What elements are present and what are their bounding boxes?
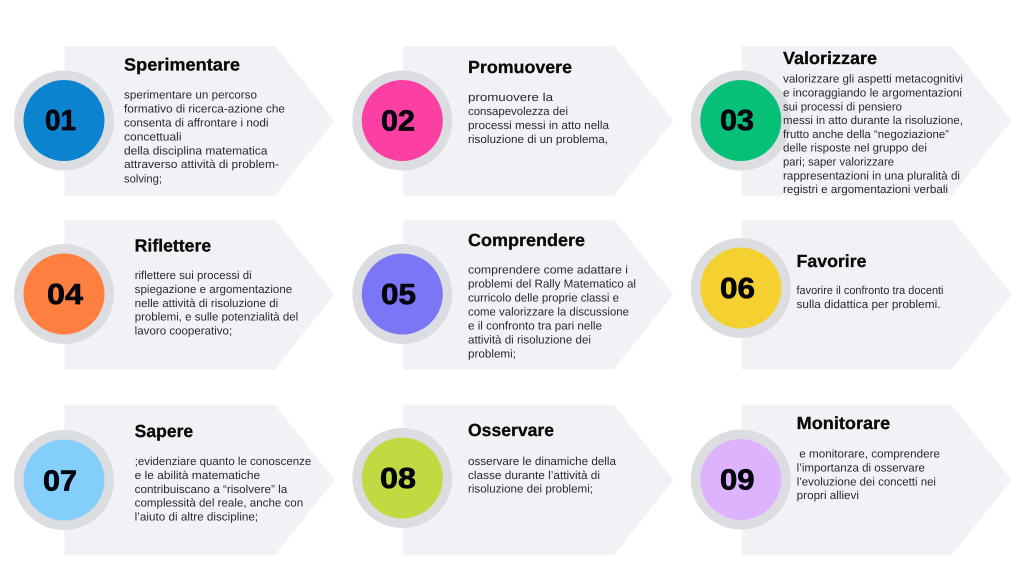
- body text 02: promuovere la: [468, 92, 554, 104]
- body text 06: sulla didattica per problemi.: [796, 299, 940, 311]
- number badge 07: [14, 430, 114, 530]
- body text 03: messi in atto durante la risoluzione,: [783, 115, 963, 127]
- body text 05: problemi;: [468, 348, 516, 360]
- body text 06: favorire il confronto tra docenti: [796, 285, 944, 297]
- body text 02: processi messi in atto nella: [468, 120, 610, 132]
- body text 08: classe durante l’attività di: [468, 470, 600, 482]
- body text 09: propri allievi: [797, 490, 859, 502]
- number badge 06: [691, 238, 791, 338]
- panel: 01 Sperimentare: [14, 46, 334, 196]
- body text 07: l’aiuto di altre discipline;: [135, 511, 258, 523]
- body text 04: problemi, e sulle potenzialità del: [135, 312, 298, 324]
- body text 01: attraverso attività di problem-: [124, 159, 279, 171]
- arrow shape 06: [742, 220, 1012, 370]
- number badge 03: [691, 70, 791, 170]
- arrow shape 01: [64, 46, 334, 196]
- body text 04: lavoro cooperativo;: [135, 325, 232, 337]
- body text 07: complessità del reale, anche con: [135, 498, 303, 510]
- body text 07: e le abilità matematiche: [135, 470, 260, 482]
- body text 07: [135, 456, 311, 523]
- number badge 08: 08: [380, 463, 416, 495]
- body text 05: curricolo delle proprie classi e: [468, 292, 619, 304]
- heading 03: Valorizzare: [783, 48, 877, 68]
- body text 09: l’importanza di osservare: [797, 462, 925, 474]
- arrow shape 08: [403, 405, 673, 555]
- body text 03: registri e argomentazioni verbali: [783, 184, 948, 196]
- body text 03: e incoraggiando le argomentazioni: [783, 88, 962, 100]
- body text 03: delle risposte nel gruppo dei: [783, 143, 927, 155]
- body text 02: risoluzione di un problema,: [468, 134, 608, 146]
- body text 04: nelle attività di risoluzione di: [135, 298, 278, 310]
- body text 07: contribuiscano a “risolvere” la: [135, 484, 288, 496]
- arrow shape 04: [64, 220, 334, 370]
- body text 01: consenta di affrontare i nodi: [124, 118, 268, 130]
- arrow shape 07: [64, 405, 334, 555]
- heading 06: Favorire: [796, 251, 867, 271]
- body text 09: [797, 449, 940, 502]
- number badge 02: [352, 70, 452, 170]
- body text 01: concettuali: [124, 131, 182, 143]
- heading 07: Sapere: [135, 421, 193, 441]
- panel: 07 Sapere: [14, 405, 334, 555]
- arrow shape 09: [742, 405, 1012, 555]
- panel: 04 Riflettere: [14, 220, 334, 370]
- body text 05: e il confronto tra pari nelle: [468, 320, 602, 332]
- body text 01: solving;: [124, 173, 162, 185]
- body text 07: ;evidenziare quanto le conoscenze: [135, 456, 311, 468]
- panel: 08 Osservare: [352, 405, 673, 555]
- arrow shape 05: [403, 220, 673, 370]
- number badge 05: 05: [381, 279, 416, 311]
- panel: 05 Comprendere: [352, 220, 673, 370]
- number badge 01: [14, 70, 114, 170]
- body text 03: [783, 74, 963, 196]
- body text 06: [796, 285, 944, 311]
- body text 05: problemi del Rally Matematico al: [468, 278, 636, 290]
- number badge 01: 01: [45, 105, 76, 137]
- heading 02: Promuovere: [468, 57, 572, 77]
- heading 08: Osservare: [468, 420, 554, 440]
- body text 04: riflettere sui processi di: [135, 270, 252, 282]
- number badge 05: [352, 244, 452, 344]
- heading 01: Sperimentare: [124, 55, 240, 75]
- body text 01: della disciplina matematica: [124, 145, 268, 157]
- body text 08: risoluzione dei problemi;: [468, 484, 593, 496]
- body text 05: come valorizzare la discussione: [468, 306, 629, 318]
- number badge 03: 03: [720, 105, 754, 137]
- arrow shape 03: [742, 46, 1012, 196]
- body text 05: [468, 264, 636, 360]
- body text 03: sui processi di pensiero: [783, 101, 902, 113]
- body text 01: sperimentare un percorso: [124, 90, 257, 102]
- body text 03: pari; saper valorizzare: [783, 156, 894, 168]
- arrow shape 02: [403, 46, 673, 196]
- number badge 02: 02: [381, 106, 415, 138]
- number badge 06: 06: [720, 273, 755, 305]
- body text 04: spiegazione e argomentazione: [135, 284, 292, 296]
- number badge 04: [14, 244, 114, 344]
- body text 01: [124, 90, 285, 185]
- number badge 09: [691, 430, 791, 530]
- panel: 06 Favorire: [691, 220, 1012, 370]
- body text 02: [468, 92, 610, 146]
- body text 04: [135, 270, 298, 337]
- body text 09: l’evoluzione dei concetti nei: [797, 476, 936, 488]
- body text 03: valorizzare gli aspetti metacognitivi: [783, 74, 963, 86]
- heading 04: Riflettere: [135, 236, 211, 256]
- number badge 08: [352, 428, 452, 528]
- number badge 09: 09: [720, 464, 754, 496]
- body text 03: rappresentazioni in una pluralità di: [783, 170, 960, 182]
- body text 08: osservare le dinamiche della: [468, 456, 617, 468]
- number badge 07: 07: [43, 466, 77, 498]
- body text 03: frutto anche della “negoziazione”: [783, 129, 949, 141]
- body text 05: attività di risoluzione dei: [468, 334, 591, 346]
- heading 09: Monitorare: [797, 413, 890, 433]
- body text 09: e monitorare, comprendere: [799, 449, 940, 461]
- body text 02: consapevolezza dei: [468, 106, 568, 118]
- number badge 04: 04: [47, 279, 83, 311]
- body text 01: formativo di ricerca-azione che: [124, 104, 285, 116]
- panel: 09 Monitorare: [691, 405, 1012, 555]
- heading 05: Comprendere: [468, 230, 585, 250]
- panel: 03 Valorizzare: [691, 46, 1012, 196]
- body text 08: [468, 456, 617, 496]
- body text 05: comprendere come adattare i: [468, 264, 628, 276]
- panel: 02 Promuovere: [352, 46, 673, 196]
